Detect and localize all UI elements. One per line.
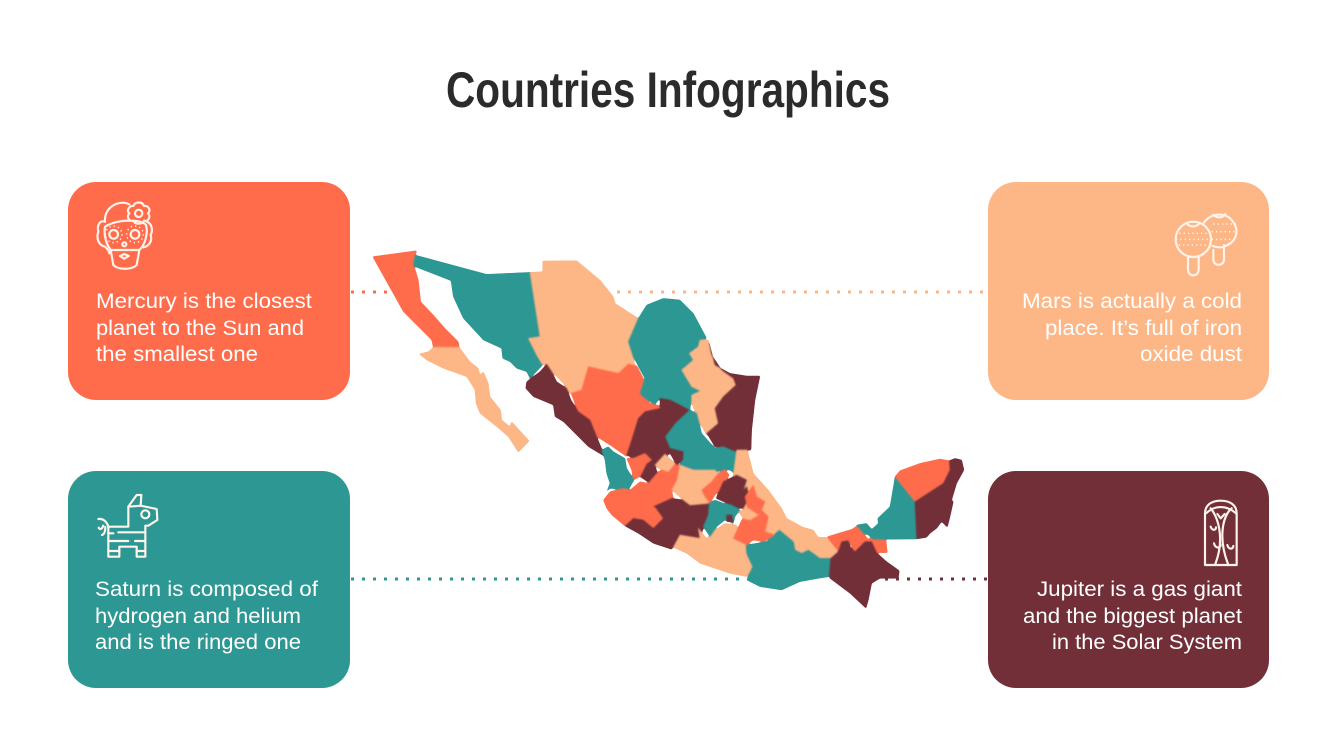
panel: Mercury xyxy=(68,182,350,400)
text: Saturn xyxy=(95,578,318,654)
text: Mercury xyxy=(96,290,312,366)
text: Mercury: planet to the Sun and xyxy=(96,317,304,340)
text: Saturn: and is the ringed one xyxy=(95,631,301,654)
dotted connector: Mars xyxy=(617,290,988,294)
text: Mars: Mars is actually a cold xyxy=(1022,290,1242,313)
text: Jupiter: and the biggest planet xyxy=(1023,605,1242,628)
text: Mars: place. It’s full of iron xyxy=(1045,317,1242,340)
panel: Jupiter xyxy=(988,471,1269,688)
text: Saturn: Saturn is composed of xyxy=(95,578,318,601)
text: Mercury: Mercury is the closest xyxy=(96,290,312,313)
icon: sugar skull xyxy=(97,202,152,269)
panel: Mars xyxy=(988,182,1269,400)
text: Jupiter: in the Solar System xyxy=(1052,631,1242,654)
text: Mars xyxy=(1022,290,1242,366)
icon: maracas xyxy=(1176,214,1237,275)
dotted connector: Mercury xyxy=(351,290,390,294)
text: Jupiter: Jupiter is a gas giant xyxy=(1037,578,1242,601)
text: Mars: oxide dust xyxy=(1140,343,1242,366)
panel: Saturn xyxy=(68,471,350,688)
text: Jupiter xyxy=(1023,578,1242,654)
dotted connector: Jupiter xyxy=(885,578,988,580)
title: Countries Infographics xyxy=(446,62,890,118)
map of Mexico xyxy=(373,251,964,608)
icon: burrito xyxy=(1205,501,1237,565)
dotted connector: Saturn xyxy=(351,578,746,580)
text: Mercury: the smallest one xyxy=(96,343,258,366)
icon: pinata xyxy=(98,495,157,557)
text: Saturn: hydrogen and helium xyxy=(95,605,301,628)
